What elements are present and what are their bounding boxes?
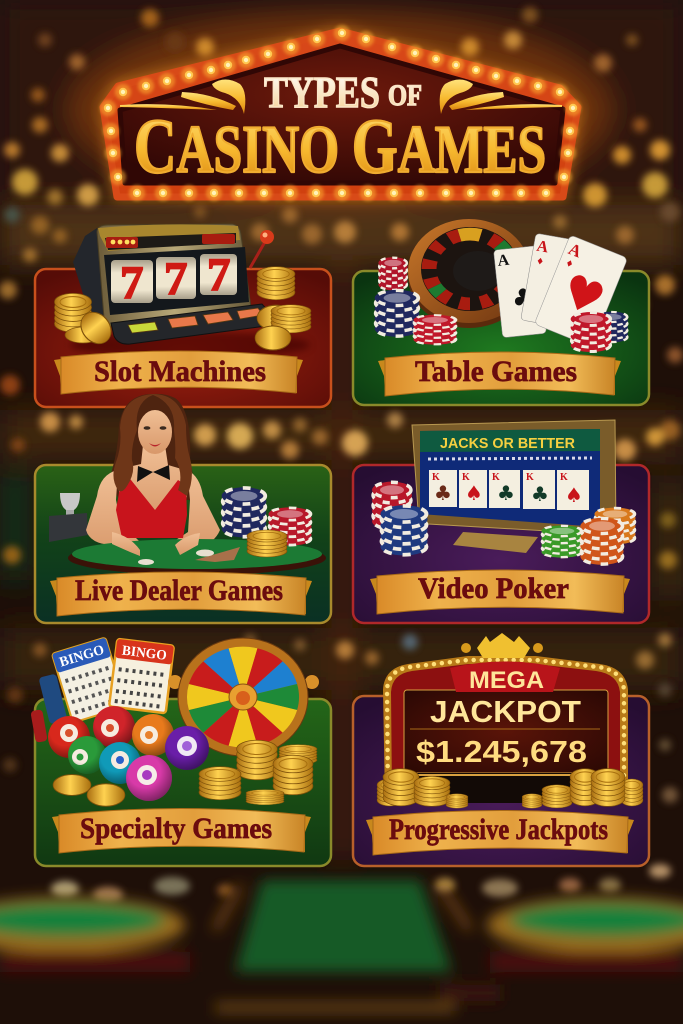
ribbon: Progressive Jackpots: Progressive Jackpots	[389, 813, 608, 846]
icon: video poker monitor	[412, 420, 616, 553]
ribbon: Slot Machines: Slot Machines	[94, 355, 266, 388]
icon: prize wheel	[168, 638, 319, 756]
poker cards: ♠	[465, 481, 483, 505]
card: ace of spades: ♣	[510, 283, 537, 316]
bingo card 1: BINGO	[58, 643, 106, 671]
panel background	[35, 269, 331, 407]
title sign marquee	[100, 25, 582, 201]
panel: Video Poker	[353, 420, 649, 623]
sign frame	[383, 656, 628, 800]
panel: Specialty Games	[30, 637, 331, 866]
icon: bingo cards	[52, 637, 174, 723]
ribbon: Video Poker	[370, 570, 630, 614]
icon: bingo balls	[48, 706, 209, 801]
title line 1: OF	[388, 79, 422, 112]
crown	[477, 633, 530, 658]
coins: progressive jackpots	[377, 769, 643, 808]
reels: 7	[164, 253, 188, 305]
panel background	[353, 465, 649, 623]
dealer face	[138, 410, 172, 454]
ribbon: Video Poker: Video Poker	[418, 572, 569, 605]
ribbon: Table Games	[378, 352, 621, 396]
reels: 7	[120, 257, 144, 309]
poker cards: ♠	[565, 483, 583, 507]
reels: 7	[207, 249, 230, 301]
dealer arms and shoulders	[86, 470, 148, 557]
card: large heart ace: ♥	[554, 262, 612, 328]
trophy	[49, 493, 88, 542]
sign panel	[120, 46, 563, 183]
ribbon: Live Dealer Games: Live Dealer Games	[75, 574, 283, 607]
icon: roulette wheel	[408, 219, 530, 328]
lever	[250, 230, 274, 268]
poker cards: ♣	[497, 481, 515, 505]
poker cards: K	[560, 472, 568, 483]
poker cards: K	[492, 472, 500, 483]
sign frame	[103, 31, 578, 197]
card: large heart ace	[534, 235, 628, 347]
poker cards: K	[526, 472, 534, 483]
screen title: JACKS OR BETTER	[440, 435, 575, 452]
card: large heart ace: ♦	[563, 258, 575, 271]
left gold swoosh	[120, 80, 245, 114]
jackpot sign: MEGA	[469, 667, 544, 694]
poker cards: ♣	[531, 482, 549, 506]
poker cards: K	[462, 472, 470, 483]
bingo tubes	[30, 674, 68, 743]
marquee lights	[100, 25, 581, 201]
panel background	[353, 271, 649, 405]
dealer chest and neck	[116, 445, 192, 520]
poker cards: K	[432, 472, 440, 483]
coins: specialty games	[53, 740, 317, 806]
poker screen	[420, 429, 600, 527]
card: large heart ace: A	[566, 239, 585, 262]
jackpot amount: $1.245,678	[416, 734, 587, 769]
card: ace of spades	[494, 246, 546, 338]
card: ace of hearts: A	[535, 238, 550, 256]
ribbon: Slot Machines	[54, 351, 303, 394]
icon: playing cards	[494, 233, 628, 347]
coins: slot machines	[54, 267, 311, 350]
frame bulbs	[387, 660, 624, 798]
panel: Table Games	[353, 219, 649, 405]
ribbon: Live Dealer Games	[50, 572, 312, 616]
panel: Live Dealer Games	[35, 394, 331, 623]
icon: slot machine	[70, 224, 310, 359]
jackpot sign	[383, 633, 628, 803]
chips: video poker	[372, 482, 636, 565]
card: ace of hearts	[521, 233, 577, 327]
table felt	[68, 539, 326, 575]
card: ace of spades: A	[497, 252, 511, 270]
poker cards: ♣	[434, 481, 452, 505]
ribbon: Specialty Games	[52, 808, 311, 853]
ribbon: Table Games: Table Games	[415, 355, 577, 388]
poker cards	[429, 470, 589, 510]
right gold swoosh	[440, 80, 562, 114]
dealer hair front	[113, 394, 192, 496]
dealer hands	[112, 532, 200, 556]
dealer	[86, 394, 220, 557]
dealer hair back	[111, 394, 196, 500]
chips: live dealer	[222, 487, 312, 557]
bow tie	[137, 465, 170, 482]
mega label	[450, 662, 560, 692]
panel background	[353, 696, 649, 866]
reels	[111, 249, 237, 309]
chips: table games	[375, 257, 628, 352]
title line 1: TYPES	[264, 68, 406, 117]
panel background	[35, 465, 331, 623]
dealer red dress	[116, 470, 187, 538]
bingo card 2: BINGO	[121, 644, 168, 664]
panel background	[35, 699, 331, 866]
panel: Slot Machines	[35, 224, 331, 407]
ribbon: Progressive Jackpots	[366, 810, 634, 855]
card: ace of hearts: ♦	[535, 257, 545, 268]
panel: Progressive Jackpots	[353, 633, 649, 866]
jackpot label: JACKPOT	[430, 694, 581, 729]
ribbon: Specialty Games: Specialty Games	[80, 812, 272, 845]
control base	[111, 304, 270, 344]
title line 2: CASINO GAMES	[134, 102, 546, 189]
